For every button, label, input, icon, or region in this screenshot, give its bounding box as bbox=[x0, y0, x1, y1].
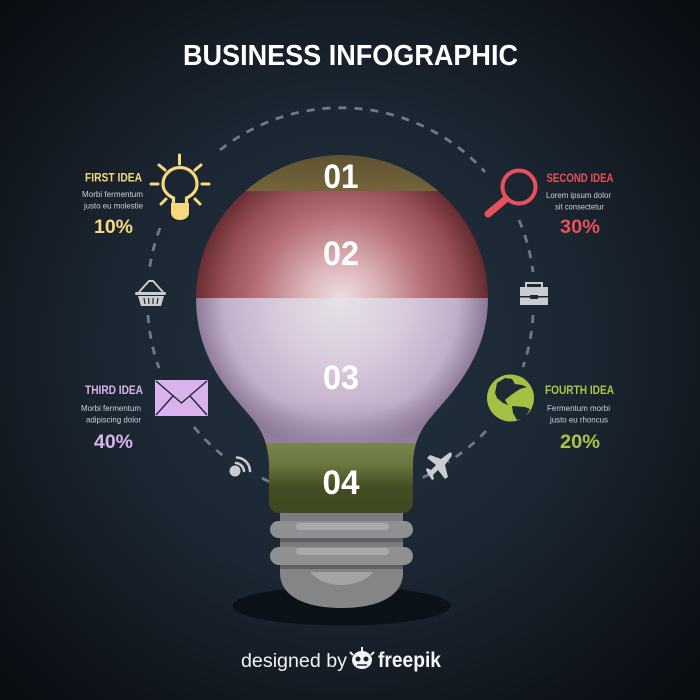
title: BUSINESS INFOGRAPHIC bbox=[183, 40, 518, 72]
icon: airplane bbox=[426, 452, 452, 480]
third idea text block: adipiscing dolor bbox=[86, 414, 141, 424]
icon: red magnifying glass bbox=[488, 170, 536, 214]
band number 02: 02 bbox=[323, 235, 359, 273]
first idea text block: Morbi fermentum bbox=[82, 189, 143, 199]
icon: wifi signal bbox=[230, 458, 250, 476]
third idea text block bbox=[81, 385, 143, 453]
light bulb glass with four percentage bands bbox=[190, 150, 495, 515]
icon: freepik mascot bbox=[350, 647, 374, 669]
band 03 bbox=[190, 298, 495, 443]
icon: shopping basket bbox=[135, 281, 166, 306]
band 03 lower shading bbox=[252, 414, 431, 443]
fourth idea text block bbox=[545, 385, 614, 453]
second idea text block: Lorem ipsum dolor bbox=[546, 190, 611, 200]
fourth idea text block: 20% bbox=[560, 432, 600, 453]
second idea text block bbox=[546, 173, 614, 238]
fourth idea text block: justo eu rhoncus bbox=[549, 414, 608, 424]
band 01 bbox=[246, 155, 438, 191]
band number 01: 01 bbox=[324, 158, 358, 196]
icon: briefcase bbox=[520, 283, 548, 305]
icon: lilac envelope bbox=[155, 380, 208, 416]
band 04 bbox=[266, 443, 416, 513]
third idea text block: THIRD IDEA bbox=[85, 385, 143, 397]
bulb screw base bbox=[270, 510, 413, 608]
footer: designed by credit: designed by bbox=[241, 651, 348, 672]
fourth idea text block: FOURTH IDEA bbox=[545, 385, 614, 397]
band number 04: 04 bbox=[322, 464, 360, 502]
icon: yellow light bulb with rays bbox=[151, 155, 209, 220]
first idea text block: 10% bbox=[94, 217, 133, 238]
fourth idea text block: Fermentum morbi bbox=[547, 403, 610, 413]
icon: green globe bbox=[487, 374, 534, 422]
third idea text block: 40% bbox=[94, 432, 133, 453]
third idea text block: Morbi fermentum bbox=[81, 403, 141, 413]
ground shadow bbox=[232, 586, 450, 626]
second idea text block: SECOND IDEA bbox=[546, 173, 614, 185]
band number 03: 03 bbox=[323, 359, 359, 397]
first idea text block: justo eu molestie bbox=[83, 200, 143, 210]
footer: freepik wordmark: freepik bbox=[378, 649, 441, 672]
dashed ring connecting the icons bbox=[148, 108, 533, 482]
band 02 bbox=[190, 191, 495, 298]
second idea text block: 30% bbox=[560, 217, 600, 238]
second idea text block: sit consectetur bbox=[555, 202, 604, 212]
first idea text block: FIRST IDEA bbox=[85, 172, 142, 184]
first idea text block bbox=[82, 172, 143, 238]
